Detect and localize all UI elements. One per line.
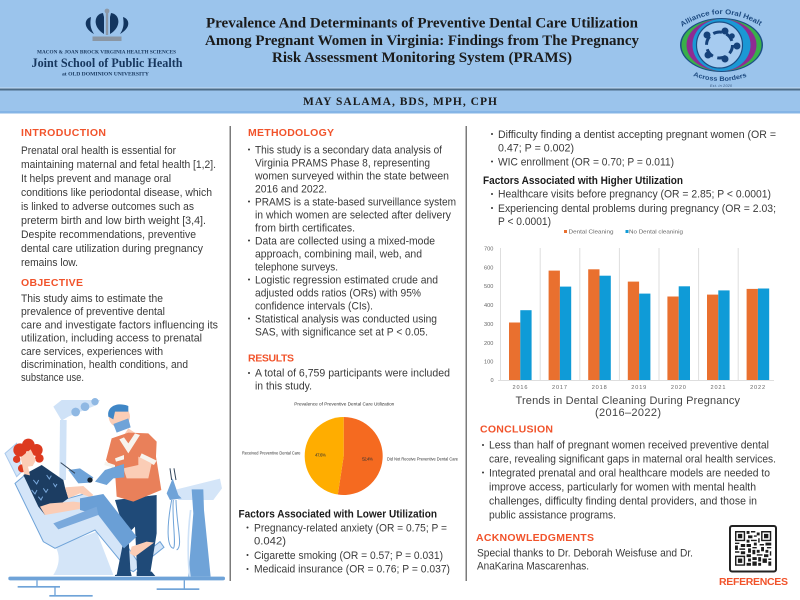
list: methodology bullets: from birth certificates. — [255, 222, 355, 234]
x axis labels: 2016 — [512, 385, 528, 391]
panel: results — [238, 353, 458, 576]
text: objective body: utilization, including access to prenatal — [21, 333, 202, 345]
y axis labels: 100 — [484, 360, 493, 366]
x axis labels: 2018 — [592, 385, 607, 391]
list: conclusion bullets — [482, 440, 776, 521]
chart caption — [516, 395, 740, 419]
list: methodology bullets: Statistical analysis was conducted using — [255, 313, 437, 325]
text: introduction body: It helps prevent and manage oral — [21, 173, 171, 185]
chart caption: (2016–2022) — [595, 407, 661, 419]
list: higher utilization factors: Experiencing dental problems during pregnancy (OR = 2.03; — [498, 203, 776, 215]
header band — [0, 0, 800, 114]
list: conclusion bullets: Less than half of pregnant women received preventive dental — [489, 440, 769, 452]
text: objective body: prevalence of preventive dental — [21, 306, 165, 318]
logo: Joint School of Public Health: Joint School of Public Health — [32, 55, 183, 70]
list: lower utilization continued: 0.47; P = 0.002) — [498, 143, 574, 155]
text: acknowledgments body: AnaKarina Mascarenhas. — [477, 561, 589, 573]
icon: QR code — [730, 526, 776, 572]
author name: MAY SALAMA, BDS, MPH, CPH — [303, 96, 497, 108]
list: higher utilization factors: P < 0.0001) — [498, 216, 551, 228]
chart: prevalence pie: Received Preventive Dental Care — [242, 450, 301, 456]
text: introduction body: Despite recommendations, preventive — [21, 229, 196, 241]
text: objective body: care services, experiences with — [21, 346, 163, 358]
text: introduction body: Prenatal oral health is essential for — [21, 145, 176, 157]
y axis labels: 0 — [490, 378, 494, 384]
text: introduction body: dental care utilization during pregnancy — [21, 243, 203, 255]
chart: prevalence pie: 47.6% — [315, 452, 326, 458]
heading: objective: OBJECTIVE — [21, 277, 83, 289]
logo: Joint School of Public Health: MACON & JOAN BROCK VIRGINIA HEALTH SCIENCES — [37, 49, 176, 55]
list: methodology bullets: telephone surveys. — [255, 261, 338, 273]
text: results summary — [248, 368, 450, 393]
panel: introduction — [21, 127, 216, 269]
text: introduction body: maintaining maternal and fetal health [1,2]. — [21, 159, 216, 171]
legend: Dental Cleaning — [568, 230, 614, 236]
chart caption: Trends in Dental Cleaning During Pregnancy — [516, 395, 740, 407]
panel: conclusion — [480, 423, 776, 521]
y axis labels — [484, 246, 494, 384]
bars — [509, 269, 769, 380]
shoes — [115, 572, 155, 576]
text: results summary: in this study. — [255, 381, 312, 393]
list: lower utilization continued: WIC enrollment (OR = 0.70; P = 0.011) — [498, 156, 674, 168]
list: methodology bullets: Virginia PRAMS Phase 8, representing — [255, 157, 430, 169]
text: objective body — [21, 293, 218, 384]
y axis labels: 400 — [484, 303, 493, 309]
text: results summary: A total of 6,759 participants were included — [255, 368, 450, 380]
title: Prevalence And Determinants of Preventive Dental Care Utilization — [206, 16, 639, 32]
lamp — [53, 398, 100, 480]
heading: methodology: METHODOLOGY — [248, 127, 334, 139]
x axis labels: 2020 — [671, 385, 686, 391]
list: lower utilization factors — [246, 522, 450, 576]
subheading: lower utilization factors: Factors Associated with Lower Utilization — [238, 508, 437, 520]
y axis labels: 200 — [484, 341, 493, 347]
title: Risk Assessment Monitoring System (PRAMS) — [272, 50, 572, 66]
legend: No Dental cleaninig — [629, 230, 683, 236]
heading: conclusion: CONCLUSION — [480, 423, 553, 435]
list: lower utilization factors: Medicaid insurance (OR = 0.76; P = 0.037) — [254, 564, 450, 576]
text: introduction body: is linked to adverse outcomes such as — [21, 201, 194, 213]
references QR code — [719, 526, 788, 588]
subheading: higher utilization factors: Factors Associated with Higher Utilization — [483, 175, 683, 187]
text: introduction body — [21, 145, 216, 269]
list: lower utilization factors: 0.042) — [254, 536, 286, 548]
text: introduction body: remains low. — [21, 257, 78, 269]
text: introduction body: preterm birth and low birth weight [3,4]. — [21, 215, 206, 227]
logo: Alliance for Oral Health Across Borders — [680, 9, 763, 88]
icon: crown — [86, 9, 128, 41]
chart: prevalence pie — [242, 402, 458, 495]
list: conclusion bullets: care, revealing significant gaps in maternal oral health services. — [489, 454, 776, 466]
text: acknowledgments body: Special thanks to Dr. Deborah Weisfuse and Dr. — [477, 548, 693, 560]
list: methodology bullets: in which women are selected after delivery — [255, 209, 451, 221]
logo: Joint School of Public Health — [32, 9, 183, 78]
chart grid — [498, 248, 774, 381]
list: conclusion bullets: improve access, particularly for women with mental health — [489, 481, 756, 493]
patient — [13, 439, 154, 557]
heading: introduction: INTRODUCTION — [21, 127, 106, 139]
dentist — [61, 404, 161, 575]
logo: Alliance for Oral Health Across Borders: Est. in 2020 — [710, 84, 732, 88]
chart: prevalence pie: Prevalence of Preventive Dental Care Utilization — [294, 402, 395, 406]
x axis labels: 2017 — [552, 385, 567, 391]
floor and base — [8, 577, 225, 597]
x axis labels — [512, 385, 765, 391]
list: methodology bullets: SAS, with significance set at P < 0.05. — [255, 326, 428, 338]
list: lower utilization factors: Cigarette smoking (OR = 0.57; P = 0.031) — [254, 550, 443, 562]
list: higher utilization factors: Healthcare visits before pregnancy (OR = 2.85; P < 0.0001) — [498, 189, 771, 201]
panel: methodology — [248, 127, 456, 338]
illustration: dentist treating patient — [5, 398, 225, 597]
dental chair — [5, 443, 164, 575]
y axis labels: 500 — [484, 284, 493, 290]
text: objective body: substance use. — [21, 372, 84, 384]
x axis labels: 2019 — [631, 385, 646, 391]
equipment unit — [167, 468, 222, 577]
list: lower utilization continued — [491, 129, 776, 168]
list: conclusion bullets: Integrated prenatal and oral healthcare models are needed to — [489, 467, 770, 479]
x axis labels: 2021 — [710, 385, 726, 391]
list: methodology bullets: approach, combining mail, web, and — [255, 248, 422, 260]
heading: acknowledgments: ACKNOWLEDGMENTS — [476, 532, 594, 544]
list: methodology bullets: Data are collected using a mixed-mode — [255, 235, 435, 247]
label: references: REFERENCES — [719, 576, 788, 588]
list: methodology bullets: women surveyed within the state between — [254, 170, 449, 182]
text: acknowledgments body — [477, 548, 693, 573]
legend — [564, 230, 683, 236]
chart: prevalence pie: 52.4% — [362, 456, 373, 462]
title — [205, 16, 639, 66]
panel: acknowledgments — [476, 532, 693, 573]
y axis labels: 600 — [484, 266, 493, 272]
list: methodology bullets: Logistic regression estimated crude and — [255, 274, 438, 286]
panel: factors continued — [483, 129, 776, 228]
list: methodology bullets: This study is a secondary data analysis of — [255, 144, 443, 156]
list: higher utilization factors — [491, 189, 776, 228]
list: methodology bullets: adjusted odds ratios (ORs) with 95% — [255, 287, 421, 299]
column dividers — [230, 126, 467, 581]
x axis labels: 2022 — [750, 385, 765, 391]
list: methodology bullets: 2016 and 2022. — [255, 183, 327, 195]
text: objective body: care and investigate factors influencing its — [21, 319, 218, 331]
title: Among Pregnant Women in Virginia: Findings from The Pregnancy — [205, 33, 639, 49]
chart: dental cleaning trends — [484, 230, 774, 419]
text: objective body: discrimination, health conditions, and — [21, 359, 188, 371]
list: lower utilization factors: Pregnancy-related anxiety (OR = 0.75; P = — [254, 522, 447, 534]
text: introduction body: conditions like periodontal disease, which — [21, 187, 212, 199]
list: methodology bullets: PRAMS is a state-based surveillance system — [255, 196, 456, 208]
list: conclusion bullets: challenges, difficulty finding dental providers, and those in — [489, 495, 757, 507]
panel: objective — [21, 277, 218, 384]
list: methodology bullets: confidence intervals (CIs). — [255, 300, 373, 312]
logo: Alliance for Oral Health Across Borders: Across Borders — [693, 72, 746, 81]
list: lower utilization continued: Difficulty finding a dentist accepting pregnant women (OR = — [498, 129, 776, 141]
list: conclusion bullets: public assistance programs. — [489, 509, 616, 521]
y axis labels: 300 — [484, 322, 493, 328]
list: methodology bullets — [248, 144, 456, 338]
logo: Joint School of Public Health: at OLD DOMINION UNIVERSITY — [62, 73, 149, 78]
y axis labels: 700 — [484, 246, 493, 252]
heading: results: RESULTS — [248, 353, 294, 365]
chart: prevalence pie: Did Not Receive Preventive Dental Care — [387, 456, 458, 462]
text: objective body: This study aims to estimate the — [21, 293, 163, 305]
